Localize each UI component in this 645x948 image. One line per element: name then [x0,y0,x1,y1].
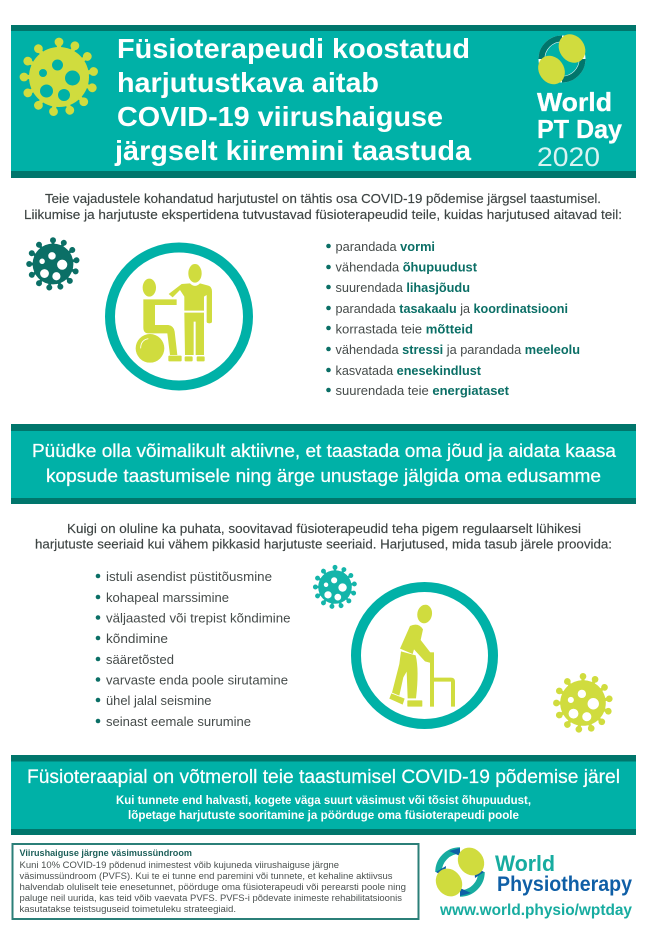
icon: dark green virus [26,237,80,291]
icon: elderly person with walker [356,587,493,724]
benefits list: suurendada teie energiataset [336,383,510,398]
callout: post-viral fatigue syndrome [12,844,418,919]
exercises list: seinast eemale surumine [106,714,251,729]
bullets [326,244,331,392]
title [114,33,472,166]
title: harjutustkava aitab [117,67,379,98]
exercises list [96,569,290,729]
intro text [24,191,622,222]
header banner [11,25,636,178]
banner: key role of physiotherapy: Füsioteraapial on võtmeroll teie taastumisel COVID-19 põdemise järel [27,767,620,788]
benefits list: vähendada õhupuudust [336,260,478,274]
icon: teal virus [313,565,357,609]
banner: key role of physiotherapy: lõpetage harjutuste sooritamine ja pöörduge oma füsioterapeudi poole [128,810,519,822]
intro text: Teie vajadustele kohandatud harjutustel on tähtis osa COVID-19 põdemise järgsel taastumisel. [45,191,601,206]
icon: therapist with patient on exercise ball [110,248,248,386]
logo: World Physiotherapy [430,842,632,919]
title: COVID-19 viirushaiguse [117,101,443,132]
icon: lime virus [553,673,613,733]
benefits list: suurendada lihasjõudu [336,280,470,295]
rest advice text: harjutuste seeriaid kui vähem pikkasid harjutuste seeriaid. Harjutused, mida tasub järele proovida: [35,536,612,552]
exercises list: varvaste enda poole sirutamine [106,672,288,688]
benefits list: parandada vormi [336,239,435,254]
title: Füsioterapeudi koostatud [117,33,470,64]
callout: post-viral fatigue syndrome: väsimussündroom (PVFS). Kui te ei tunne end paremini või tunnete, et kehaline aktiivsus [20,871,393,882]
icon: lime virus in header [20,38,99,117]
rest advice text: Kuigi on oluline ka puhata, soovitavad füsioterapeudid teha pigem regulaarselt lühikesi [67,521,581,536]
exercises list: kõndimine [106,631,168,646]
benefits list: parandada tasakaalu ja koordinatsiooni [336,301,568,316]
bullets [96,574,100,723]
banner: key role of physiotherapy: Kui tunnete end halvasti, kogete väga suurt väsimust või tõsist õhupuudust, [116,795,531,807]
benefits list: kasvatada enesekindlust [336,363,482,378]
logo: World Physiotherapy: World [495,851,555,876]
banner: key role of physiotherapy [11,755,636,835]
banner: stay active: kopsude taastumisele ning ärge unustage jälgida oma edusamme [46,466,601,486]
callout: post-viral fatigue syndrome: kasutatakse teistsuguseid toimetuleku strateegiaid. [20,904,236,915]
title: järgselt kiiremini taastuda [114,135,472,166]
benefits list [326,239,580,398]
exercises list: väljaasted või trepist kõndimine [106,610,290,626]
callout: post-viral fatigue syndrome: halvendab oluliselt teie enesetunnet, pöörduge oma füsioterapeudi või perearsti poole ning [20,882,406,893]
exercises list: sääretõsted [106,652,174,667]
benefits list: korrastada teie mõtteid [336,322,473,336]
rest advice text [35,521,612,552]
intro text: Liikumise ja harjutuste ekspertidena tutvustavad füsioterapeudid teile, kuidas harjutused aitavad teil: [24,207,622,222]
logo: World PT Day 2020: World [537,87,612,117]
logo: World PT Day 2020 [533,29,623,172]
benefits list: vähendada stressi ja parandada meeleolu [336,342,580,357]
callout: post-viral fatigue syndrome: Viirushaiguse järgne väsimussündroom [20,848,192,859]
callout: post-viral fatigue syndrome: Kuni 10% COVID-19 põdenud inimestest võib kujuneda viirushaiguse järgne [20,860,339,871]
exercises list: istuli asendist püstitõusmine [106,569,272,584]
logo: World PT Day 2020: PT Day [537,114,623,144]
banner: stay active: Püüdke olla võimalikult aktiivne, et taastada oma jõud ja aidata kaasa [32,441,617,461]
banner: stay active [11,424,636,504]
logo: World PT Day 2020: 2020 [537,142,600,172]
exercises list: ühel jalal seismine [106,693,212,708]
logo: World Physiotherapy: Physiotherapy [497,873,632,896]
logo: World Physiotherapy: www.world.physio/wptday [439,902,632,919]
exercises list: kohapeal marssimine [106,590,229,605]
callout: post-viral fatigue syndrome: paluge neil uurida, kas teid võib vaevata PVFS. PVFS-i põdevate inimeste rehabilitatsioonis [20,893,402,904]
